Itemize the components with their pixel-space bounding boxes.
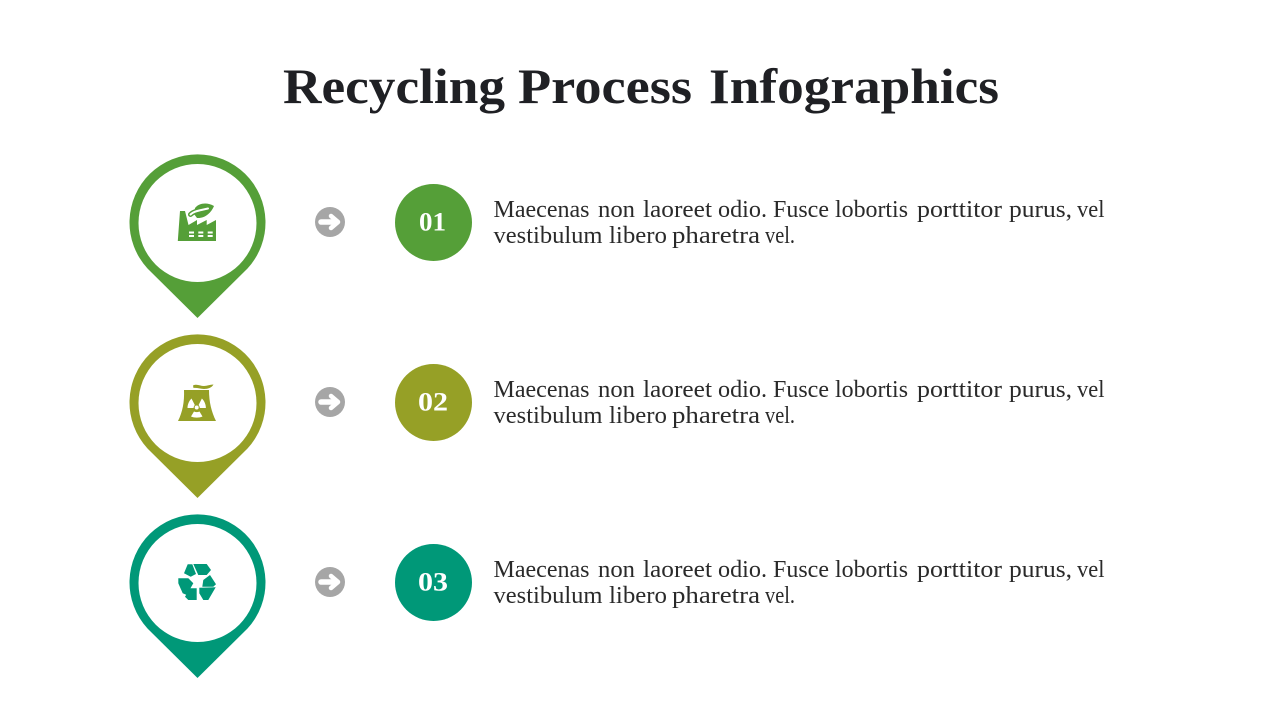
icon: recycling symbol: [178, 564, 216, 600]
icon: nuclear cooling tower: [178, 384, 216, 421]
text block 2: vel: [1077, 376, 1105, 403]
text block 3: pharetra: [672, 582, 760, 609]
arrow 2: [315, 387, 345, 417]
text block 1: purus,: [1009, 196, 1072, 223]
pin marker 3: [130, 514, 266, 678]
text block 3: laoreet: [643, 556, 712, 583]
text block 1: non: [598, 196, 635, 223]
row 1: [130, 154, 1105, 318]
text block 3: purus,: [1009, 556, 1072, 583]
text block 3: libero: [609, 582, 667, 609]
number badge 03: 03: [418, 568, 448, 596]
text block 1: Fusce: [773, 196, 829, 223]
text block 1: libero: [609, 222, 667, 249]
text block 2: non: [598, 376, 635, 403]
text block 1: vel: [1077, 196, 1105, 223]
text block 2: libero: [609, 402, 667, 429]
text block 3: Fusce: [773, 556, 829, 583]
row 2: [130, 334, 1105, 498]
text block 2: vel.: [765, 402, 795, 429]
text block 3: porttitor: [917, 556, 1002, 583]
text block 1: laoreet: [643, 196, 712, 223]
text block 3: lobortis: [835, 556, 908, 583]
text block 2: [494, 376, 1105, 429]
arrow 3: [315, 567, 345, 597]
number badge 03: [395, 544, 472, 621]
number badge 01: 01: [419, 208, 446, 236]
text block 3: non: [598, 556, 635, 583]
text block 3: Maecenas: [494, 556, 590, 583]
title: Process: [518, 58, 692, 114]
text block 1: Maecenas: [494, 196, 590, 223]
text block 3: vel: [1077, 556, 1105, 583]
arrow 1: [315, 207, 345, 237]
text block 1: vestibulum: [494, 222, 602, 249]
text block 2: lobortis: [835, 376, 908, 403]
title: Recycling: [283, 58, 505, 114]
icon: eco factory: [178, 204, 216, 241]
text block 1: odio.: [718, 196, 767, 223]
text block 2: vestibulum: [494, 402, 602, 429]
text block 2: purus,: [1009, 376, 1072, 403]
pin marker 1: [130, 154, 266, 318]
text block 1: pharetra: [672, 222, 760, 249]
text block 1: vel.: [765, 222, 795, 249]
text block 3: [494, 556, 1105, 609]
text block 2: Maecenas: [494, 376, 590, 403]
text block 1: lobortis: [835, 196, 908, 223]
text block 2: odio.: [718, 376, 767, 403]
text block 1: [494, 196, 1105, 249]
title: Infographics: [709, 58, 999, 114]
pin marker 2: [130, 334, 266, 498]
row 3: [130, 514, 1105, 678]
number badge 02: [395, 364, 472, 441]
text block 3: odio.: [718, 556, 767, 583]
number badge 02: 02: [418, 388, 448, 416]
text block 2: Fusce: [773, 376, 829, 403]
text block 3: vestibulum: [494, 582, 602, 609]
text block 3: vel.: [765, 582, 795, 609]
text block 2: laoreet: [643, 376, 712, 403]
text block 1: porttitor: [917, 196, 1002, 223]
text block 2: pharetra: [672, 402, 760, 429]
number badge 01: [395, 184, 472, 261]
text block 2: porttitor: [917, 376, 1002, 403]
